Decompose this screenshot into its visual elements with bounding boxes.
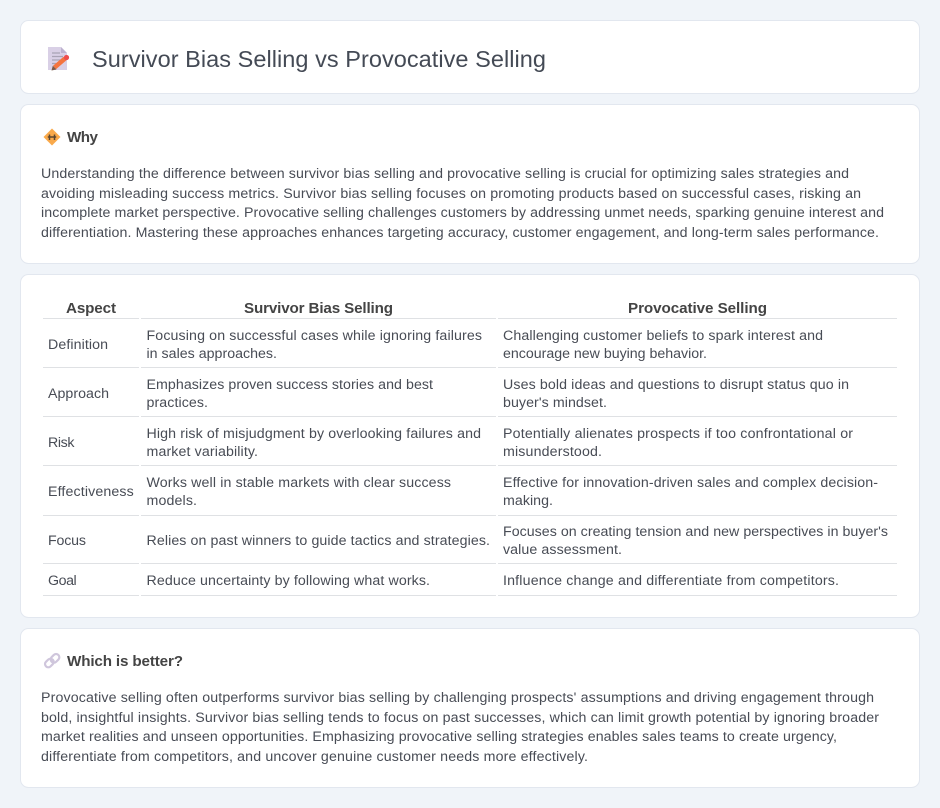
- table header row: [66, 300, 767, 317]
- row: effectiveness: Effective for innovation-driven sales and complex decision-: [503, 475, 878, 491]
- heading: which is better: Which is better?: [67, 653, 183, 670]
- row: definition: [48, 328, 823, 362]
- table header row: Aspect: [66, 300, 116, 317]
- table header row: Survivor Bias Selling: [244, 300, 393, 317]
- row: approach: Approach: [48, 386, 109, 402]
- panel: header: [20, 20, 920, 94]
- row: effectiveness: Works well in stable markets with clear success: [146, 475, 451, 491]
- text block: why paragraph: Understanding the difference between survivor bias selling and provocative selling is crucial for optimizing sales strategies and: [41, 166, 849, 182]
- row: risk: market variability.: [146, 444, 258, 460]
- text block: which is better paragraph: Provocative selling often outperforms survivor bias selling by challenging prospects' assumptions and driving engagement through: [41, 690, 874, 706]
- row: risk: Risk: [48, 435, 75, 451]
- row: goal: Influence change and differentiate from competitors.: [503, 573, 839, 589]
- text block: which is better paragraph: [41, 690, 879, 765]
- row: definition: Focusing on successful cases while ignoring failures: [146, 328, 482, 344]
- row: effectiveness: making.: [503, 493, 553, 509]
- text block: why paragraph: [41, 166, 884, 241]
- row: definition: encourage new buying behavior.: [503, 346, 707, 362]
- row: definition: Challenging customer beliefs to spark interest and: [503, 328, 823, 344]
- icon: document with pencil: [48, 47, 69, 70]
- icon: chain link: [44, 653, 61, 669]
- row: effectiveness: Effectiveness: [48, 484, 134, 500]
- text block: which is better paragraph: differentiate from competitors, and uncover genuine customer needs more effectively.: [41, 749, 588, 765]
- row: goal: Reduce uncertainty by following what works.: [146, 573, 430, 589]
- row: approach: Emphasizes proven success stories and best: [146, 377, 433, 393]
- text block: why paragraph: avoiding misleading success metrics. Survivor bias selling focuses on promoting products based on successful cases, risking an: [41, 186, 861, 202]
- table header row: Provocative Selling: [628, 300, 767, 317]
- row: risk: Potentially alienates prospects if too confrontational or: [503, 426, 853, 442]
- text block: why paragraph: incomplete market perspective. Provocative selling challenges customers by addressing unmet needs, sparking genuine interest and: [41, 205, 884, 221]
- panel: which is better: [20, 628, 920, 788]
- row: focus: Relies on past winners to guide tactics and strategies.: [146, 533, 490, 549]
- row: focus: value assessment.: [503, 542, 622, 558]
- text block: why paragraph: differentiation. Mastering these approaches enhances targeting accuracy, customer engagement, and long-term sales performance.: [41, 225, 879, 241]
- row: focus: Focus: [48, 533, 86, 549]
- row: approach: Uses bold ideas and questions to disrupt status quo in: [503, 377, 849, 393]
- text block: which is better paragraph: market realities and unseen opportunities. Emphasizing provocative selling strategies enables sales teams to create urgency,: [41, 729, 837, 745]
- row: risk: [48, 426, 853, 460]
- icon: warning diamond: [44, 128, 60, 146]
- row: goal: [48, 573, 839, 589]
- row: focus: [48, 524, 888, 558]
- row: approach: practices.: [146, 395, 208, 411]
- title: Survivor Bias Selling vs Provocative Selling: [92, 46, 546, 72]
- text block: which is better paragraph: bold, insightful insights. Survivor bias selling tends to focus on past successes, which can limit growth potential by ignoring broader: [41, 710, 879, 726]
- row: effectiveness: models.: [146, 493, 197, 509]
- row: definition: in sales approaches.: [146, 346, 277, 362]
- row: risk: High risk of misjudgment by overlooking failures and: [146, 426, 481, 442]
- panel: comparison table: [20, 274, 920, 618]
- row: goal: Goal: [48, 573, 77, 589]
- panel: why: [20, 104, 920, 264]
- row: focus: Focuses on creating tension and new perspectives in buyer's: [503, 524, 888, 540]
- row: effectiveness: [48, 475, 878, 509]
- row: definition: Definition: [48, 337, 108, 353]
- row: approach: [48, 377, 849, 411]
- row: approach: buyer's mindset.: [503, 395, 607, 411]
- row: risk: misunderstood.: [503, 444, 602, 460]
- heading: why: Why: [67, 129, 99, 146]
